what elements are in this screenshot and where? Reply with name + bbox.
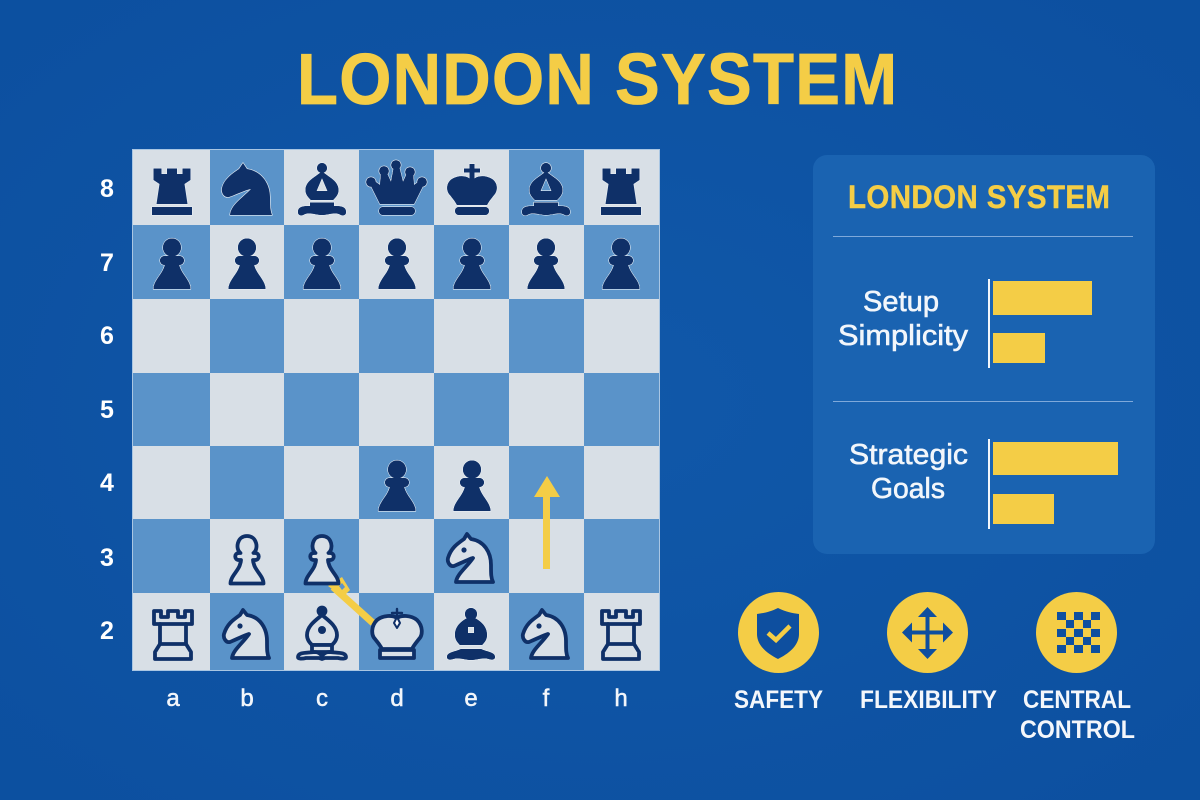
white pieces [154, 534, 640, 659]
label: setup simplicity [838, 286, 969, 352]
rank labels: 6 [100, 322, 114, 350]
label: flexibility: FLEXIBILITY [860, 686, 997, 714]
bars: strategic goals [988, 439, 1118, 529]
label: strategic goals [849, 439, 968, 505]
rank labels: 3 [100, 544, 114, 572]
title: LONDON SYSTEM [297, 39, 897, 120]
panel: london system summary [813, 155, 1155, 554]
label: setup simplicity: Simplicity [838, 320, 969, 352]
icon: central control checkerboard [1036, 592, 1117, 673]
chess board [132, 149, 660, 671]
rank labels: 7 [100, 249, 114, 277]
file labels: d [390, 685, 404, 712]
file labels: e [464, 685, 478, 712]
file labels: c [316, 685, 328, 712]
rank labels [100, 175, 114, 645]
label: safety: SAFETY [734, 686, 823, 714]
file labels: h [614, 685, 628, 712]
rank labels: 2 [100, 617, 114, 645]
rank labels: 4 [100, 469, 114, 497]
black pieces [152, 160, 641, 660]
diagonal yellow arrow c3 to d2 [328, 577, 373, 623]
vertical yellow arrow f3 to f4 [534, 476, 560, 569]
label: central control [1020, 686, 1135, 744]
label: central control: CENTRAL [1023, 686, 1131, 714]
label: strategic goals: Strategic [849, 439, 968, 471]
icon: flexibility arrows [887, 592, 968, 673]
label: strategic goals: Goals [871, 473, 945, 505]
label: setup simplicity: Setup [863, 286, 939, 318]
panel heading: LONDON SYSTEM [848, 179, 1110, 215]
file labels: f [543, 685, 550, 712]
bars: setup simplicity [988, 279, 1092, 368]
file labels [166, 685, 628, 712]
file labels: b [240, 685, 254, 712]
rank labels: 8 [100, 175, 114, 203]
label: central control: CONTROL [1020, 716, 1135, 744]
file labels: a [166, 685, 180, 712]
icon: safety shield [738, 592, 819, 673]
rank labels: 5 [100, 396, 114, 424]
